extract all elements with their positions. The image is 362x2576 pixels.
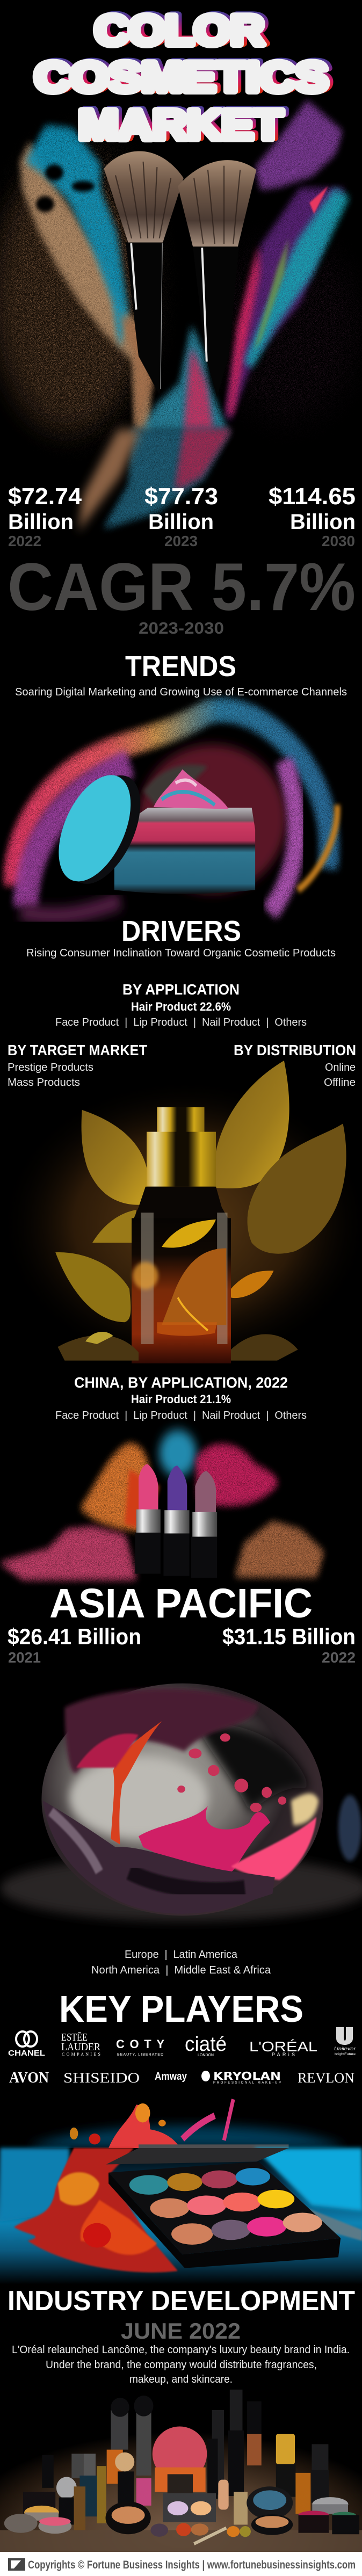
by distribution segment bbox=[234, 1042, 356, 1089]
image: lipsticks with powder clouds bbox=[0, 1430, 323, 1579]
Asia Pacific heading: ASIA PACIFIC bbox=[49, 1580, 313, 1627]
Asia Pacific 2021 value: $26.41 Billion bbox=[8, 1624, 141, 1649]
by distribution segment: BY DISTRIBUTION bbox=[234, 1042, 356, 1058]
market size 2030: $114.65 bbox=[269, 483, 356, 510]
development description: makeup, and skincare. bbox=[129, 2374, 233, 2385]
by application segment: Face Product | Lip Product | Nail Product | Others bbox=[55, 1017, 307, 1028]
other regions bbox=[91, 1949, 271, 1976]
key players heading: KEY PLAYERS bbox=[59, 1988, 303, 2030]
market size 2023: $77.73 bbox=[144, 483, 218, 510]
title lettering: COLOR bbox=[95, 6, 264, 54]
China by application segment bbox=[55, 1374, 307, 1421]
image: makeup brushes and powder bbox=[0, 101, 358, 433]
logo: Estee Lauder: LAUDER bbox=[61, 2041, 101, 2053]
image: cosmetic jar with colour swirl bbox=[14, 710, 337, 916]
logo: Unilever: Unilever bbox=[334, 2046, 356, 2051]
development description: Under the brand, the company would distribute fragrances, bbox=[46, 2359, 317, 2371]
logo: Estee Lauder bbox=[61, 2031, 101, 2057]
logo: Shiseido: SHISEIDO bbox=[63, 2070, 140, 2086]
logo: Kryolan bbox=[201, 2070, 281, 2085]
footer bbox=[0, 2552, 362, 2576]
market size 2023 bbox=[144, 483, 218, 549]
by application segment bbox=[55, 981, 307, 1028]
image: serum bottle with gold leaves bbox=[0, 1061, 362, 1369]
China by application segment: CHINA, BY APPLICATION, 2022 bbox=[74, 1374, 288, 1391]
market size 2022 bbox=[8, 483, 82, 549]
other regions: Europe | Latin America bbox=[125, 1949, 238, 1961]
image: assorted makeup products bbox=[0, 2385, 362, 2552]
China by application segment: Hair Product 21.1% bbox=[131, 1392, 231, 1406]
logo: Amway: Amway bbox=[155, 2071, 187, 2082]
icon: Fortune Business Insights logo bbox=[8, 2558, 25, 2571]
market size 2023: 2023 bbox=[164, 533, 198, 549]
CAGR period: 2023-2030 bbox=[139, 619, 224, 637]
by application segment: Hair Product 22.6% bbox=[131, 1000, 231, 1013]
logo: Unilever bbox=[334, 2027, 356, 2056]
development description bbox=[12, 2344, 350, 2385]
logo: Avon: AVON bbox=[9, 2070, 49, 2086]
by target market segment bbox=[8, 1042, 147, 1089]
title shadow: MARKET bbox=[82, 100, 286, 147]
market size 2022: $72.74 bbox=[8, 483, 82, 510]
Asia Pacific 2022 value bbox=[222, 1624, 356, 1666]
drivers text: Rising Consumer Inclination Toward Organic Cosmetic Products bbox=[26, 947, 336, 959]
logo: Unilever: brightFuture bbox=[335, 2053, 356, 2056]
by application segment: BY APPLICATION bbox=[122, 981, 240, 998]
title lettering: MARKET bbox=[78, 101, 283, 148]
logo: Coty: BEAUTY, LIBERATED bbox=[117, 2053, 163, 2057]
Asia Pacific 2021 value bbox=[8, 1624, 141, 1666]
by distribution segment: Offline bbox=[324, 1077, 356, 1089]
logo: Coty bbox=[116, 2037, 164, 2057]
logo: Estee Lauder: COMPANIES bbox=[62, 2052, 100, 2057]
key player logos bbox=[8, 2027, 356, 2086]
Asia Pacific 2021 value: 2021 bbox=[8, 1649, 41, 1666]
logo: Kryolan: KRYOLAN bbox=[213, 2070, 281, 2082]
by target market segment: Mass Products bbox=[8, 1077, 80, 1089]
title lettering bbox=[34, 6, 328, 148]
development date: JUNE 2022 bbox=[121, 2318, 241, 2343]
logo: Coty: COTY bbox=[116, 2037, 164, 2051]
logo: Chanel: CHANEL bbox=[8, 2049, 45, 2058]
logo: Kryolan: PROFESSIONAL MAKE-UP bbox=[213, 2081, 281, 2085]
other regions: North America | Middle East & Africa bbox=[91, 1964, 271, 1976]
title lettering: COSMETICS bbox=[34, 53, 328, 100]
image: eyeshadow palette splash top bbox=[28, 2099, 346, 2148]
logo: Ciate: LONDON bbox=[198, 2053, 214, 2057]
by target market segment: Prestige Products bbox=[8, 1062, 93, 1073]
title bbox=[34, 5, 331, 148]
drivers heading: DRIVERS bbox=[121, 915, 241, 947]
market size 2030: 2030 bbox=[322, 533, 355, 549]
market size 2030 bbox=[269, 483, 356, 549]
market size 2022: Billion bbox=[8, 510, 74, 534]
market size 2022: 2022 bbox=[8, 533, 41, 549]
logo: Chanel bbox=[8, 2031, 45, 2058]
trends text: Soaring Digital Marketing and Growing Use of E-commerce Channels bbox=[15, 686, 347, 698]
trends heading: TRENDS bbox=[125, 650, 236, 683]
by target market segment: BY TARGET MARKET bbox=[8, 1042, 147, 1058]
title shadow bbox=[38, 5, 331, 147]
title shadow: COSMETICS bbox=[38, 52, 331, 99]
logo: L'Oreal Paris: L'ORÉAL bbox=[249, 2038, 317, 2055]
logo: L'Oreal Paris: PARiS bbox=[272, 2052, 295, 2057]
industry development heading: INDUSTRY DEVELOPMENT bbox=[8, 2285, 355, 2317]
by distribution segment: Online bbox=[325, 1062, 356, 1073]
image: eyeshadow palette in water bbox=[0, 2148, 362, 2284]
market size 2023: Billion bbox=[148, 510, 214, 534]
development description: L'Oréal relaunched Lancôme, the company's luxury beauty brand in India. bbox=[12, 2344, 350, 2356]
logo: Estee Lauder: ESTĒE bbox=[61, 2031, 88, 2043]
image: powder trailing below brushes bbox=[78, 430, 231, 531]
image: glass globe with pink splash bbox=[0, 1684, 362, 1921]
market size 2030: Billion bbox=[290, 510, 356, 534]
China by application segment: Face Product | Lip Product | Nail Product | Others bbox=[55, 1410, 307, 1421]
title shadow: COLOR bbox=[98, 5, 267, 53]
Asia Pacific 2022 value: 2022 bbox=[322, 1649, 356, 1666]
logo: Revlon: REVLON bbox=[298, 2070, 354, 2086]
logo: Ciate: ciaté bbox=[185, 2033, 227, 2056]
